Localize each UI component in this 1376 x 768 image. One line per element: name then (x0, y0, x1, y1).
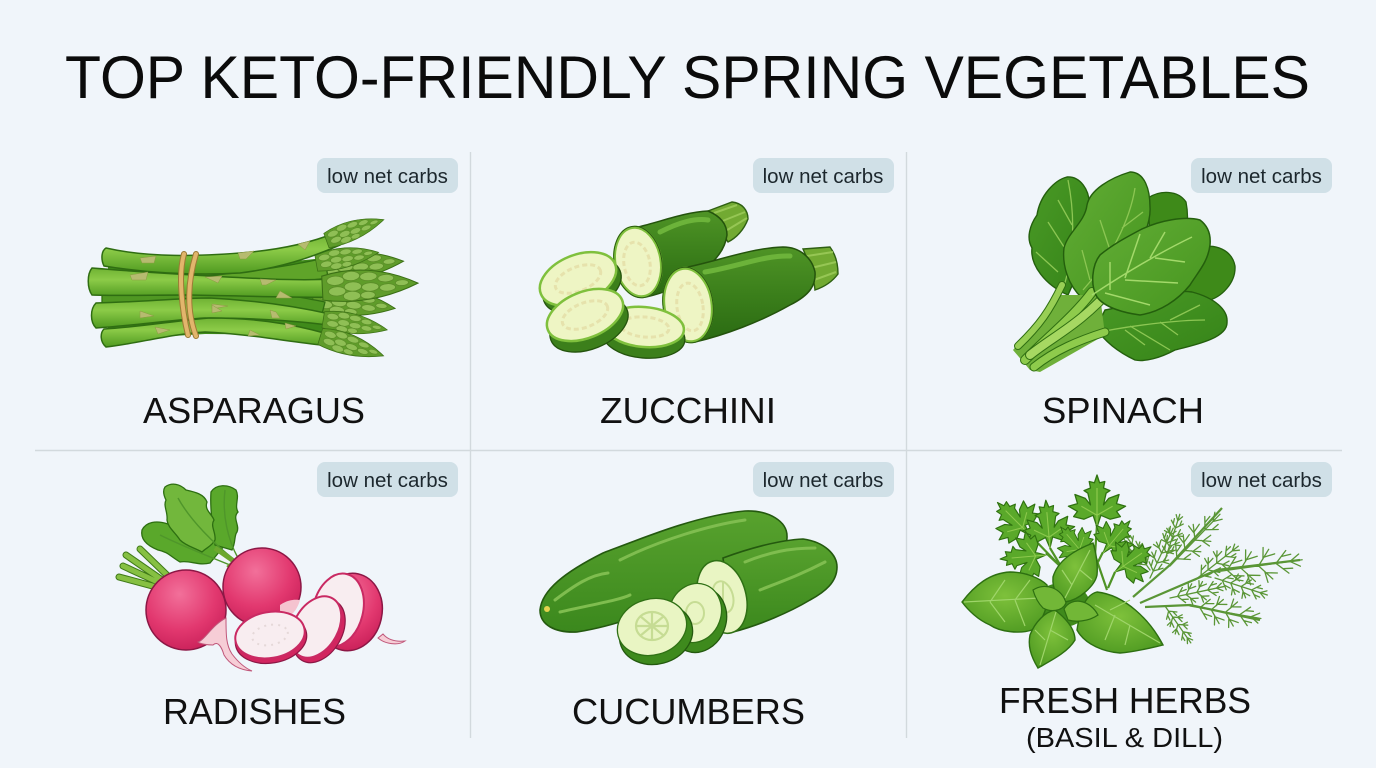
panel: cucumbers (540, 462, 894, 732)
panel: asparagus (88, 158, 458, 431)
badge: low net carbs (1191, 462, 1332, 497)
badge: low net carbs (1191, 158, 1332, 193)
icon: fresh herbs (962, 475, 1305, 668)
panel: fresh herbs (962, 462, 1332, 753)
panel: zucchini (532, 158, 894, 431)
badge: low net carbs (753, 158, 894, 193)
label: fresh herbs: FRESH HERBS (999, 680, 1251, 721)
icon: spinach (1013, 172, 1235, 372)
sublabel: basil and dill: (BASIL & DILL) (1026, 722, 1223, 753)
panel: radishes (119, 462, 458, 732)
badge: low net carbs: low net carbs (1201, 469, 1322, 492)
badge: low net carbs (753, 462, 894, 497)
label: cucumbers: CUCUMBERS (572, 691, 805, 732)
label: asparagus: ASPARAGUS (143, 390, 365, 431)
icon: cucumbers (540, 511, 837, 673)
icon: asparagus bundle (88, 210, 419, 365)
badge: low net carbs (317, 158, 458, 193)
icon: zucchini (532, 202, 838, 363)
panel: spinach (1013, 158, 1332, 431)
badge: low net carbs: low net carbs (1201, 165, 1322, 188)
badge: low net carbs: low net carbs (763, 165, 883, 188)
title: TOP KETO-FRIENDLY SPRING VEGETABLES (65, 44, 1310, 111)
badge: low net carbs: low net carbs (763, 469, 883, 492)
badge: low net carbs: low net carbs (327, 469, 448, 492)
label: spinach: SPINACH (1042, 390, 1204, 431)
label: zucchini: ZUCCHINI (600, 390, 776, 431)
icon: radishes (119, 484, 405, 672)
badge: low net carbs (317, 462, 458, 497)
label: radishes: RADISHES (163, 691, 346, 732)
badge: low net carbs: low net carbs (327, 165, 448, 188)
